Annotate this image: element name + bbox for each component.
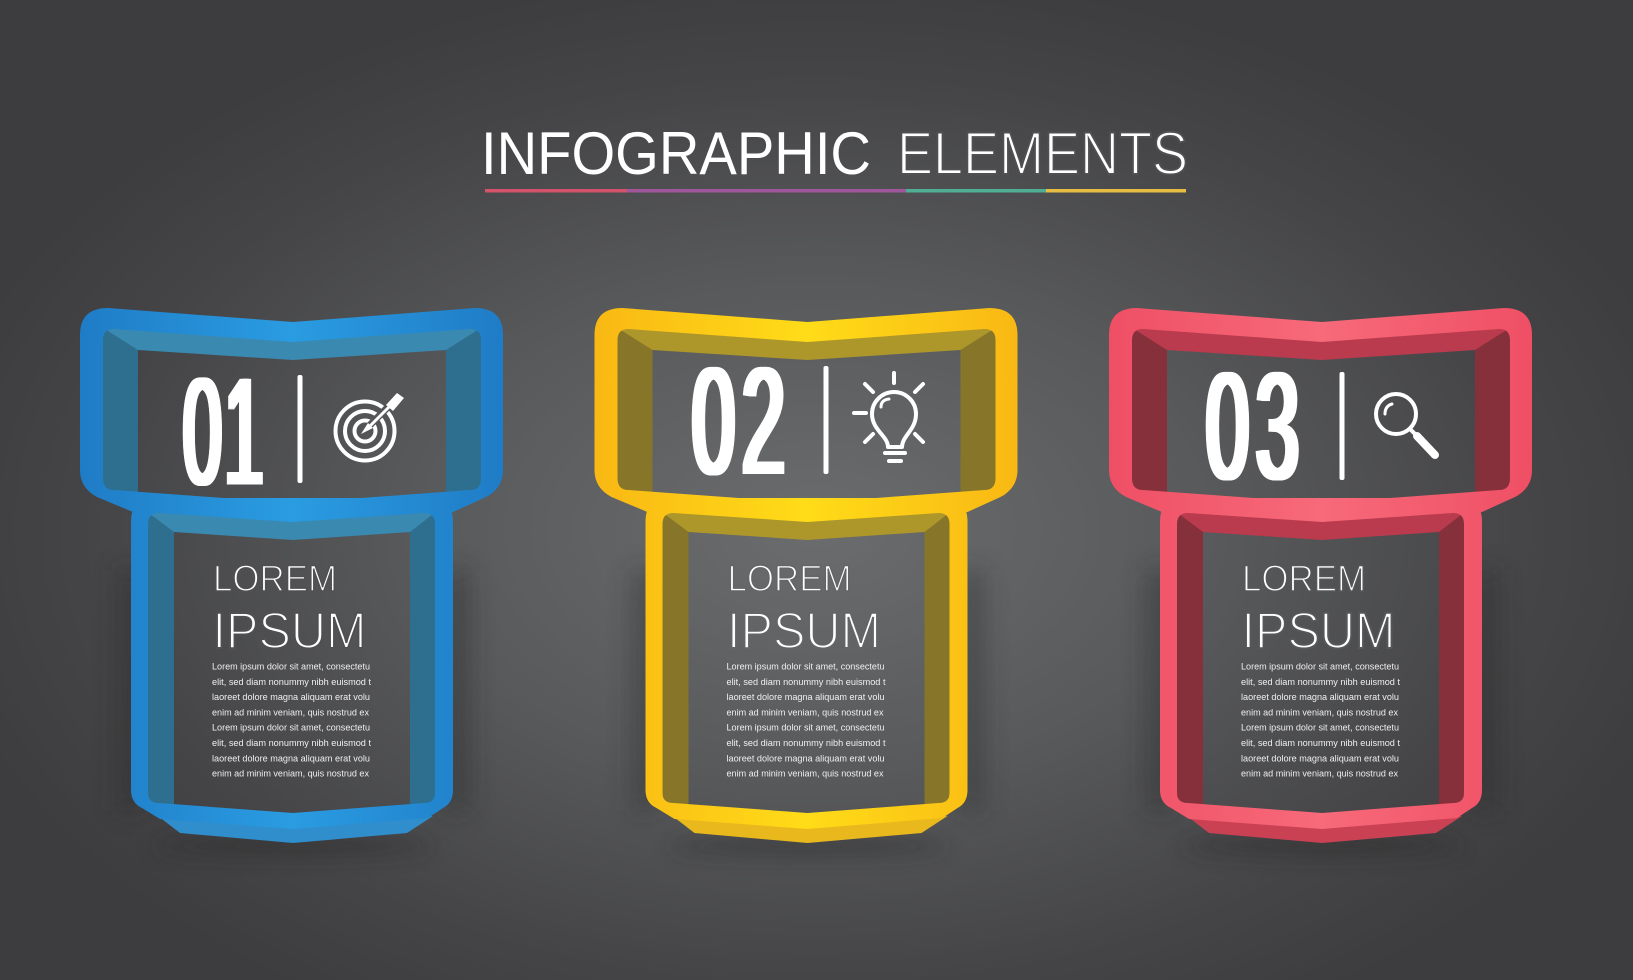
divider [824,366,828,474]
lower base face [158,816,433,843]
title underline [485,189,1186,192]
lower base face [1187,816,1462,843]
number 03: 03 [1206,342,1306,512]
body text: enim ad minim veniam, quis nostrud ex [212,769,369,780]
number 02: 02 [692,336,792,506]
body text: laoreet dolore magna aliquam erat volu [726,692,884,703]
body text: Lorem ipsum dolor sit amet, consectetu [1241,662,1399,672]
body text: Lorem ipsum dolor sit amet, consectetu [726,723,884,734]
body text: enim ad minim veniam, quis nostrud ex [726,769,884,780]
heading: LOREM [728,558,852,599]
body text: elit, sed diam nonummy nibh euismod t [1241,738,1400,749]
body text: laoreet dolore magna aliquam erat volu [212,753,370,764]
lower frame [646,498,968,829]
body text: elit, sed diam nonummy nibh euismod t [726,738,886,749]
heading [212,558,366,659]
panel 1: blue: 01 [183,347,266,517]
heading: LOREM [213,558,337,599]
icon: light bulb [854,373,923,461]
icon: target with arrow [336,393,404,460]
title [481,120,1188,187]
upper frame [594,308,1018,522]
body text: laoreet dolore magna aliquam erat volu [726,753,884,764]
upper depth faces [96,322,490,496]
body text [1241,662,1400,780]
title word: infographic: INFOGRAPHIC [481,120,871,187]
divider [1340,372,1344,480]
icon: magnifying glass [1376,394,1435,455]
body text: Lorem ipsum dolor sit amet, consectetu [212,723,370,734]
body text: Lorem ipsum dolor sit amet, consectetu [1241,723,1399,734]
heading: IPSUM [212,602,366,659]
body text: elit, sed diam nonummy nibh euismod t [1241,677,1400,688]
heading: IPSUM [727,602,881,659]
panel 3: red [1109,308,1532,855]
heading [1242,558,1396,659]
body text: enim ad minim veniam, quis nostrud ex [212,707,369,718]
body text: laoreet dolore magna aliquam erat volu [1241,692,1399,703]
upper frame [1109,308,1532,522]
lower depth faces [144,510,440,806]
drop shadow [120,570,467,855]
panel 1: blue [80,308,503,855]
lower base face [672,816,948,843]
heading: IPSUM [1242,602,1396,659]
body text: Lorem ipsum dolor sit amet, consectetu [212,662,370,672]
upper depth faces [1125,322,1519,496]
body text: Lorem ipsum dolor sit amet, consectetu [726,662,884,672]
body text [212,662,371,780]
heading: LOREM [1242,558,1366,599]
lower frame [131,498,453,829]
body text: laoreet dolore magna aliquam erat volu [212,692,370,703]
body text: elit, sed diam nonummy nibh euismod t [726,677,886,688]
lower frame [1160,498,1482,829]
heading [727,558,881,659]
title word: elements: ELEMENTS [897,120,1188,187]
lower depth faces [1173,510,1469,806]
body text: elit, sed diam nonummy nibh euismod t [212,738,371,749]
body text: laoreet dolore magna aliquam erat volu [1241,753,1399,764]
divider [298,375,302,483]
upper frame [80,308,503,522]
body text: enim ad minim veniam, quis nostrud ex [1241,769,1398,780]
body text: elit, sed diam nonummy nibh euismod t [212,677,371,688]
drop shadow [1149,570,1496,855]
upper depth faces [610,322,1004,496]
body text: enim ad minim veniam, quis nostrud ex [726,707,884,718]
lower depth faces [658,510,954,806]
body text [726,662,886,780]
body text: enim ad minim veniam, quis nostrud ex [1241,707,1398,718]
drop shadow [634,570,982,855]
panel 2: yellow [594,308,1018,855]
